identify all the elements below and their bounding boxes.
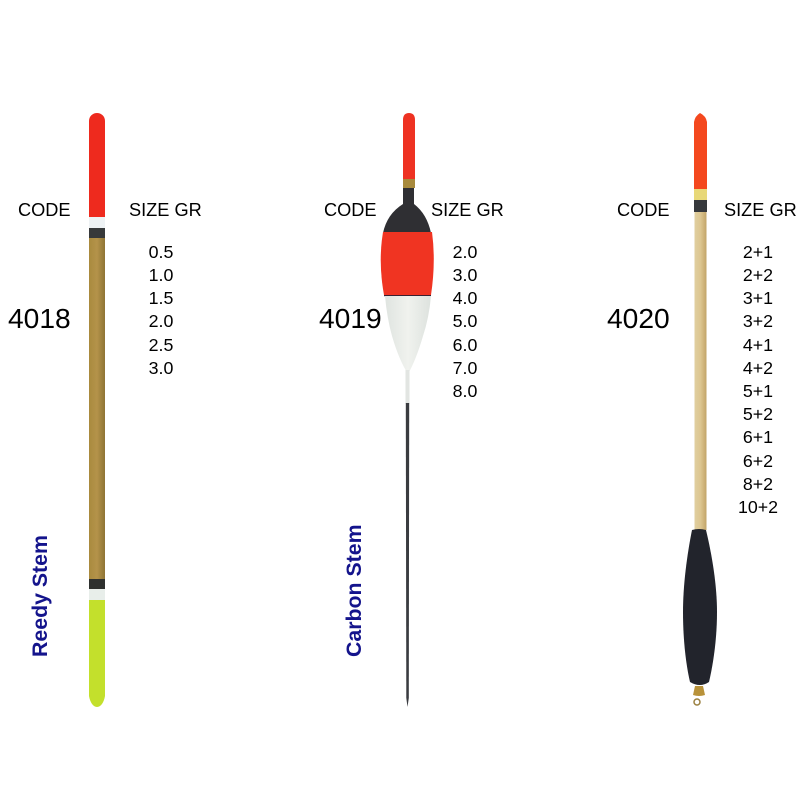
body divider line — [384, 295, 431, 296]
size heading: SIZE GR — [431, 200, 504, 220]
vertical label: Reedy Stem: Reedy Stem — [28, 535, 52, 657]
yellow-green tail — [89, 600, 105, 707]
size values: 8+2 — [743, 474, 773, 494]
size values: 10+2 — [738, 497, 778, 517]
size values: 4+1 — [743, 335, 773, 355]
size values: 5+2 — [743, 404, 773, 424]
white band — [89, 217, 105, 228]
size heading: SIZE GR — [129, 200, 202, 220]
float 4020: cane stem weighted float — [683, 113, 717, 705]
size values: 6+1 — [743, 427, 773, 447]
code heading: CODE — [617, 200, 670, 220]
red tip — [89, 113, 105, 219]
float 4018: reedy stem float — [89, 113, 105, 707]
size values: 2+1 — [743, 242, 773, 262]
size values: 4+2 — [743, 358, 773, 378]
size values: 3.0 — [453, 265, 477, 285]
size values — [453, 242, 477, 401]
size values: 3+2 — [743, 311, 773, 331]
size values — [738, 242, 778, 517]
size values: 3+1 — [743, 288, 773, 308]
size values: 0.5 — [149, 242, 173, 262]
size values: 5.0 — [453, 311, 477, 331]
red body — [381, 232, 434, 295]
code number: 4018 — [8, 302, 71, 334]
cane stem — [694, 212, 706, 530]
vertical label: Carbon Stem: Carbon Stem — [342, 524, 366, 657]
swivel eye — [694, 699, 700, 705]
carbon stem — [406, 403, 409, 707]
size values: 2.0 — [149, 311, 173, 331]
lower black band — [89, 579, 105, 589]
labels for 4019 — [319, 200, 504, 401]
float 4019: carbon stem float — [381, 113, 434, 707]
brown stem — [89, 238, 105, 579]
size values: 2.0 — [453, 242, 477, 262]
labels for 4018 — [8, 200, 202, 378]
yellow band — [694, 189, 707, 200]
lower white band — [89, 589, 105, 600]
size values: 6.0 — [453, 335, 477, 355]
size values: 5+1 — [743, 381, 773, 401]
code heading: CODE — [18, 200, 71, 220]
black band — [694, 200, 707, 212]
size values: 6+2 — [743, 451, 773, 471]
size values: 1.0 — [149, 265, 173, 285]
size heading: SIZE GR — [724, 200, 797, 220]
code heading: CODE — [324, 200, 377, 220]
white stem section — [406, 370, 410, 404]
brass swivel — [693, 686, 705, 696]
size values: 2+2 — [743, 265, 773, 285]
size values: 4.0 — [453, 288, 477, 308]
size values: 2.5 — [149, 335, 173, 355]
red tip — [403, 113, 415, 179]
white lower body — [385, 296, 431, 374]
orange tip — [694, 113, 707, 189]
size values — [149, 242, 173, 378]
size values: 3.0 — [149, 358, 173, 378]
code number: 4020 — [607, 302, 670, 334]
black weighted body — [683, 529, 717, 685]
size values: 8.0 — [453, 381, 477, 401]
black band — [89, 228, 105, 238]
code number: 4019 — [319, 302, 382, 334]
size values: 7.0 — [453, 358, 477, 378]
gold band — [403, 179, 415, 188]
labels for 4020 — [607, 200, 797, 517]
size values: 1.5 — [149, 288, 173, 308]
black shoulder — [383, 188, 431, 233]
